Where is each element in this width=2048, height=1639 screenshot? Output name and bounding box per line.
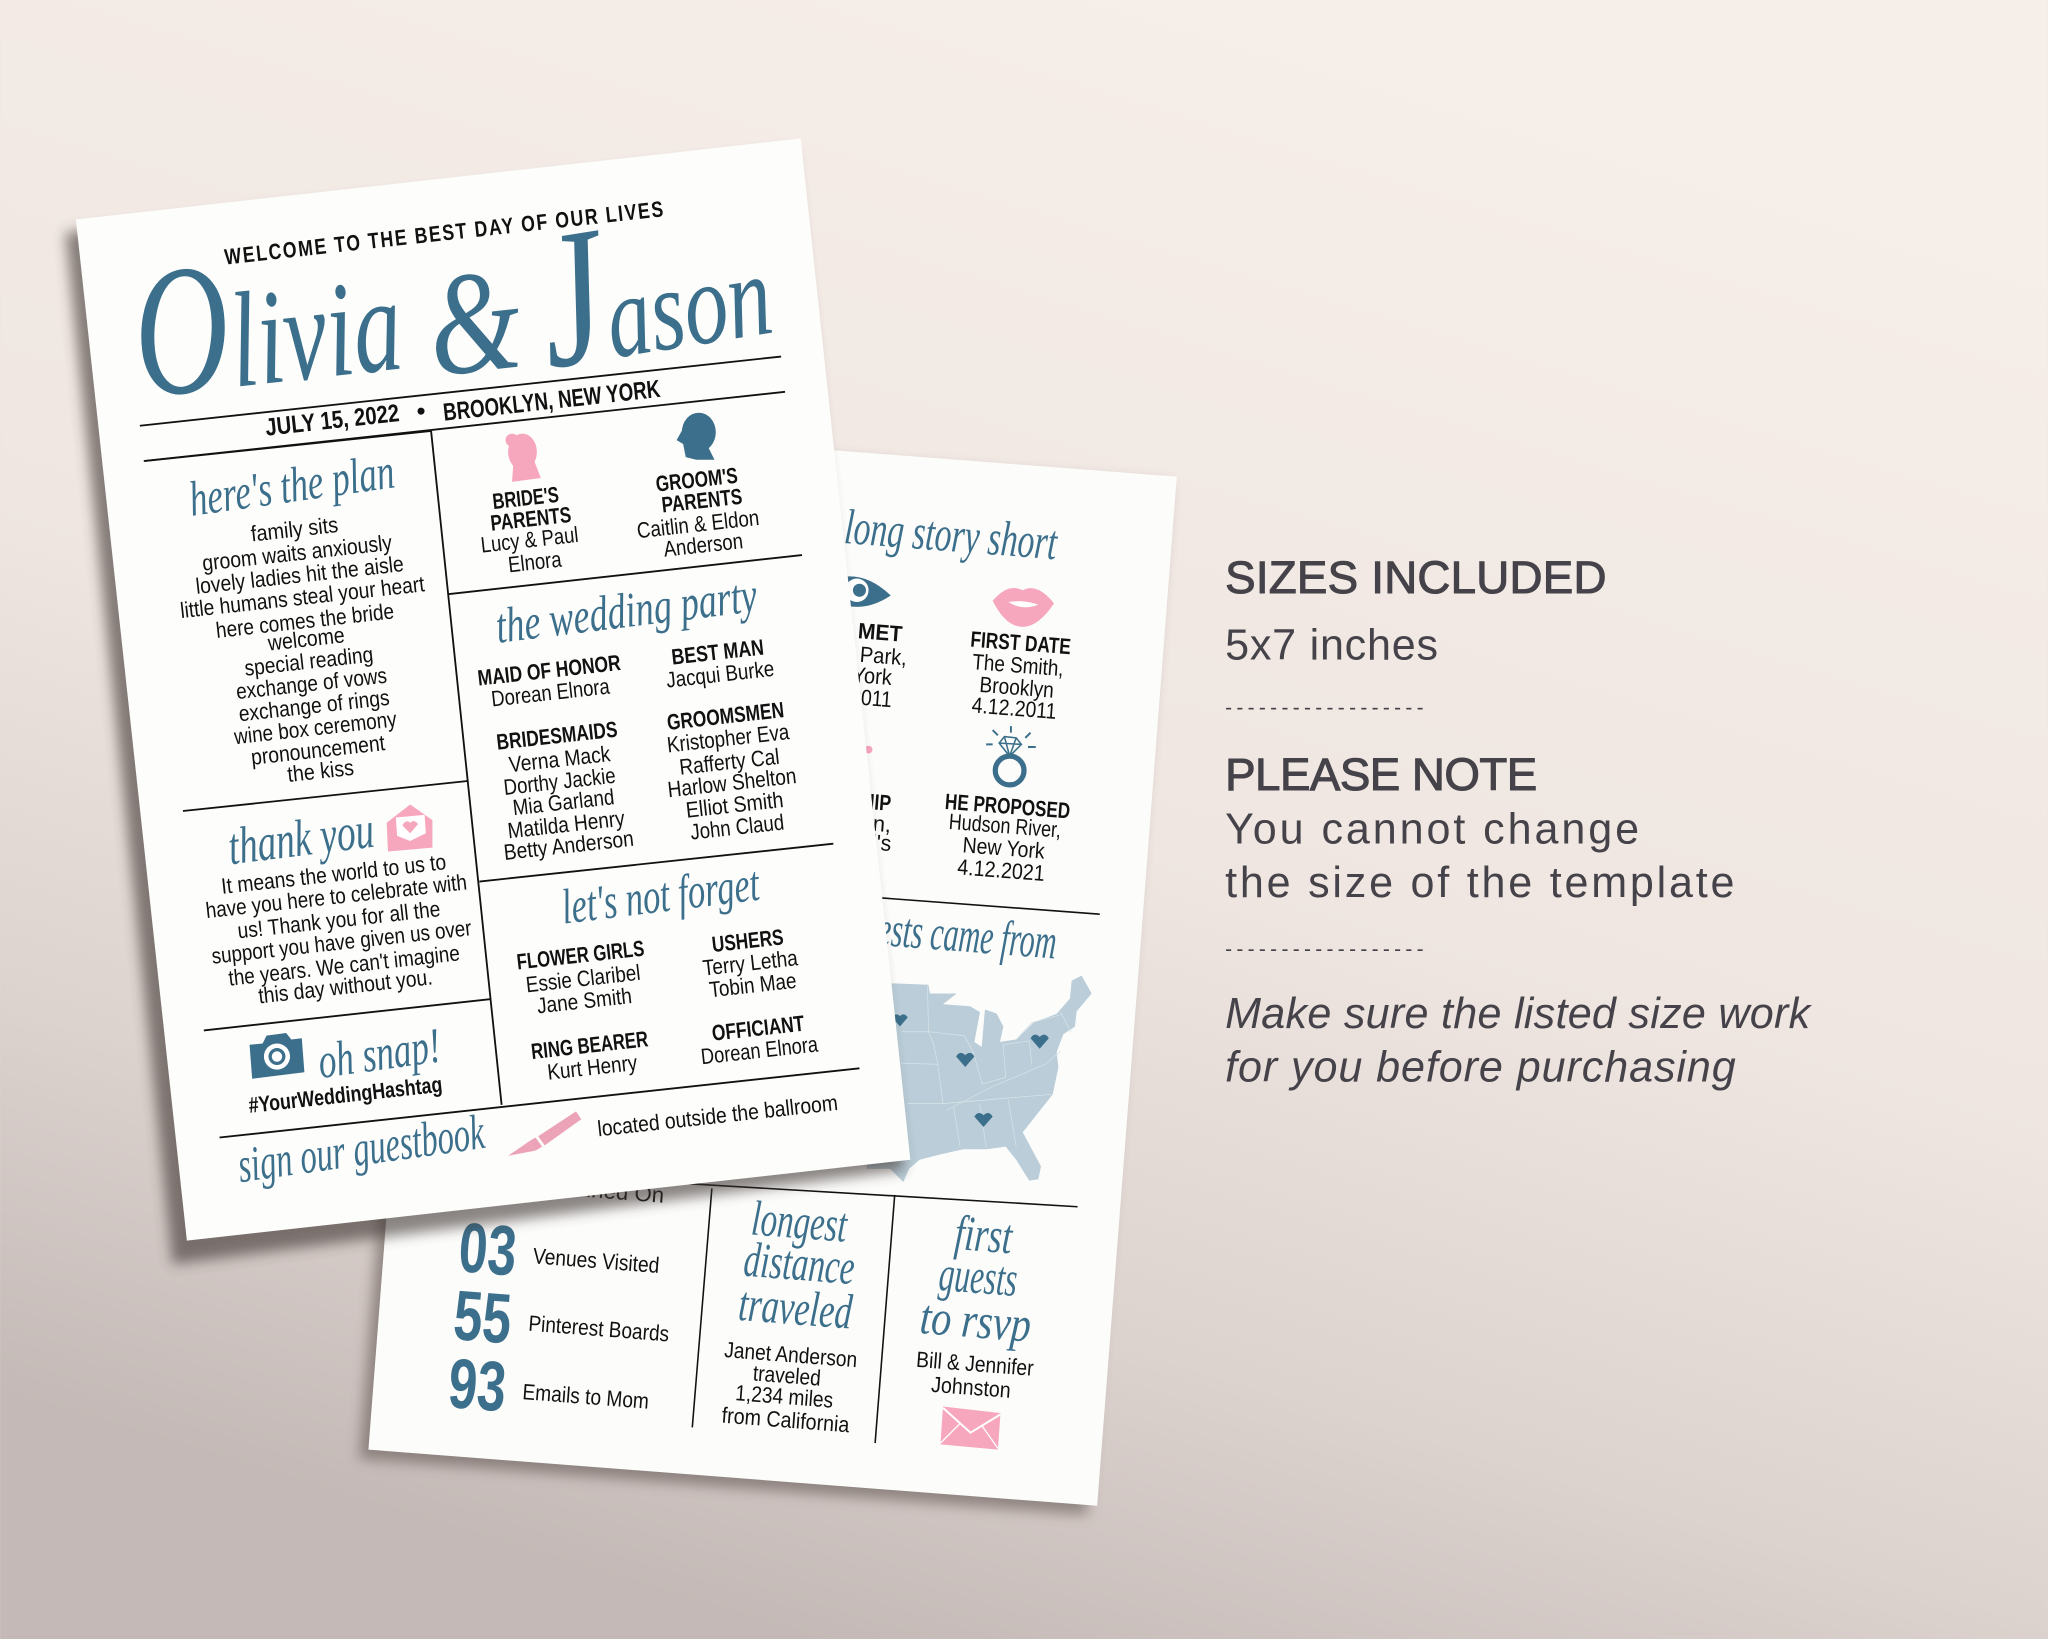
list: ceremony order: pronouncement [250,730,386,770]
icon: eye [816,576,891,607]
text: purchase warning: for you before purchasing [1225,1043,1736,1091]
panel: stats [446,1169,670,1426]
panel: thank you [204,801,473,1008]
icon: fountain pen [508,1111,581,1156]
block: ring bearer [530,1026,649,1085]
text: longest distance details: 1,234 miles [734,1380,834,1413]
block: ushers [701,924,800,1002]
block: first met: New York [806,659,894,690]
block: groom's parents: Anderson [662,528,744,562]
block: first met: 4.12.2011 [806,681,893,712]
list: ceremony order: little humans steal your heart [179,571,426,623]
stat: venues visited [456,1207,660,1290]
heading: first guests to rsvp: guests [937,1246,1019,1307]
list: ceremony order: family sits [250,512,339,547]
block: flower girls [515,936,645,1018]
block: maid of honor: Dorean Elnora [490,674,611,711]
panel: here's the plan [179,444,426,787]
guestbook location: located outside the ballroom [596,1090,839,1141]
heading: sizes included: SIZES INCLUDED [1225,552,1606,603]
title: names [123,160,782,438]
text: please note: You cannot change [1225,806,1639,854]
icon: love letter [387,804,432,851]
block: groomsmen: Kristopher Eva [666,719,791,757]
date and location: • [415,398,427,426]
list: ceremony order: exchange of rings [237,685,391,726]
block: he proposed: HE PROPOSED [944,789,1071,823]
block: ushers: Terry Letha [701,945,800,981]
text: thank you message: this day without you. [257,964,434,1008]
heading: first guests to rsvp: first [953,1205,1015,1264]
date and location: JULY 15, 2022 [264,400,401,442]
heading: longest distance traveled [737,1191,857,1340]
text: thank you message: the years. We can't imagine [227,940,461,991]
block: flower girls: FLOWER GIRLS [515,936,645,974]
block: first met: Central Park, [789,636,908,670]
block: officiant: OFFICIANT [711,1011,806,1046]
text: first guests names: Johnston [930,1372,1012,1403]
block: groom's parents: Caitlin & Eldon [636,505,760,543]
list: ceremony order: exchange of vows [235,663,388,704]
block: bridesmaids: Matilda Henry [506,805,627,843]
block: he proposed: New York [962,832,1046,864]
panel: longest distance traveled [721,1191,858,1437]
list: ceremony order: here comes the bride [215,598,395,643]
heading: first guests to rsvp: to rsvp [918,1289,1033,1353]
block: bridesmaids: Dorthy Jackie [502,763,617,800]
block: first date: FIRST DATE [970,627,1072,659]
block: bridesmaids: BRIDESMAIDS [495,717,619,755]
list: ceremony order: lovely ladies hit the aisle [194,551,405,599]
panel dividers: back bottom row [679,1183,1078,1443]
heading: longest distance traveled: longest [750,1191,850,1253]
text: thank you message: support you have given us over [210,915,473,969]
title: names: Jason [522,160,782,410]
block: ring bearer: RING BEARER [530,1026,649,1064]
text: please note: the size of the template [1225,859,1734,907]
stat: emails to mom: Emails to Mom [522,1379,650,1414]
block: relationship: Manhattan, [781,804,892,837]
text: first guests names: Bill & Jennifer [915,1347,1035,1381]
stat: pinterest boards: Pinterest Boards [528,1311,670,1346]
list: ceremony order: special reading [243,642,374,681]
heading: here's the plan: here's the plan [186,444,398,527]
block: bride's parents: PARENTS [489,502,572,536]
map hearts [892,1014,1049,1127]
block: groomsmen: Elliot Smith [685,787,785,823]
block: best man [665,635,775,693]
icon: envelope [940,1407,1000,1450]
block: first met: FIRST MET [791,613,904,647]
block: bridesmaids: Verna Mack [508,741,612,777]
panel: oh snap [247,1017,444,1118]
text: thank you message: us! Thank you for all the [236,896,441,943]
block: officiant: Dorean Elnora [700,1031,820,1069]
block: ushers: Tobin Mae [708,968,798,1002]
block: relationship [760,781,892,856]
block: he proposed: 4.12.2021 [956,854,1046,886]
block: bride's parents: BRIDE'S [491,482,560,514]
block: maid of honor [476,650,622,711]
block: flower girls: Jane Smith [536,983,633,1018]
block: relationship: Paul's [833,827,892,856]
stat: planned on: Hours Planned On [481,1169,665,1208]
block: groomsmen: John Claud [689,809,785,845]
heading: first guests to rsvp [918,1205,1033,1353]
block: groomsmen: Harlow Shelton [666,763,798,802]
text: thank you message: have you here to celebrate with [204,869,468,923]
icon: groom silhouette [677,413,716,460]
block: groom's parents: GROOM'S [654,463,739,497]
date and location [264,376,662,442]
block: best man: Jacqui Burke [665,656,775,693]
icon: diamond ring [986,726,1036,785]
list: ceremony order [179,512,426,787]
heading: longest distance traveled: traveled [737,1276,854,1340]
block: he proposed [944,789,1071,886]
block: groom's parents [636,463,760,562]
back card shadow [359,428,1169,1515]
text: longest distance details: Janet Anderson [723,1337,858,1372]
list: ceremony order: the kiss [286,755,355,787]
heading: the wedding party: the wedding party [493,567,761,654]
panel: parents [479,413,760,577]
back card sheet [368,421,1177,1506]
text: purchase warning [1225,990,1813,1091]
heading: sign our guestbook: sign our guestbook [234,1104,488,1193]
panel: back card [359,421,1177,1515]
stat: venues visited: Venues Visited [532,1243,660,1278]
block: groom's parents: PARENTS [660,484,744,517]
text: purchase warning: Make sure the listed size work [1225,990,1813,1038]
block: first date [970,627,1072,724]
stat: emails to mom [446,1343,650,1426]
stat: venues visited: 03 [456,1207,519,1290]
text: first guests names [915,1347,1035,1403]
block: groomsmen: Rafferty Cal [678,744,781,780]
block: first date: 4.12.2011 [971,692,1057,724]
front card shadow [65,151,904,1264]
heading: guests came from: guests came from [846,899,1059,970]
block: groomsmen: GROOMSMEN [666,697,785,735]
list: ceremony order: welcome [266,622,346,656]
text: longest distance details: from California [721,1403,851,1437]
block: bride's parents: Lucy & Paul [479,522,580,558]
panel: where guests came from [846,899,1092,1182]
panel: let's not forget [515,856,820,1085]
icon: lips [993,588,1054,627]
date and location: BROOKLYN, NEW YORK [442,376,662,427]
block: bride's parents: Elnora [507,547,563,577]
panel: product notes [1225,552,1813,1091]
heading: oh snap: oh snap! [315,1017,444,1089]
heading: let's not forget: let's not forget [558,856,763,935]
block: first met [789,613,908,712]
block: flower girls: Essie Claribel [525,960,642,997]
text: longest distance details [721,1337,858,1437]
panel: sign our guestbook [234,1090,839,1193]
block: first date: The Smith, [972,649,1065,681]
block: ring bearer: Kurt Henry [546,1050,639,1085]
title: names: Olivia [123,205,410,438]
block: maid of honor: MAID OF HONOR [476,650,622,691]
panel: front card [65,138,910,1264]
block: bridesmaids [495,717,635,865]
text: please note [1225,806,1734,907]
text: size: 5x7 inches [1225,622,1438,670]
heading: long story short: long story short [843,499,1060,570]
divider: ------------------ [1225,938,1424,961]
divider: ------------------ [1225,696,1424,719]
welcome heading: WELCOME TO THE BEST DAY OF OUR LIVES [223,196,666,270]
panel: first guests to rsvp [915,1205,1035,1450]
heading: please note: PLEASE NOTE [1225,749,1537,800]
block: bridesmaids: Betty Anderson [502,826,635,865]
heading: thank you: thank you [225,801,377,876]
hashtag: #YourWeddingHashtag [247,1072,443,1118]
title: names: & [420,237,529,408]
block: first date: Brooklyn [979,672,1055,703]
block: groomsmen [666,697,798,845]
map: eastern United States [867,976,1092,1182]
block: relationship: RELATIONSHIP [760,781,892,816]
stat: pinterest boards: 55 [451,1275,514,1358]
icon: hidden heart [865,746,873,754]
stat: pinterest boards [451,1275,670,1358]
list: ceremony order: groom waits anxiously [201,530,394,576]
front card sheet [76,138,910,1241]
block: officiant [700,1011,820,1069]
block: he proposed: Hudson River, [948,809,1062,843]
stat: emails to mom: 93 [446,1343,509,1426]
block: bride's parents [479,482,580,577]
list: ceremony order: wine box ceremony [232,706,399,749]
icon: camera [250,1033,304,1079]
block: best man: BEST MAN [670,635,765,670]
block: ushers: USHERS [711,924,785,957]
heading: longest distance traveled: distance [742,1232,857,1295]
text: thank you message: It means the world to us to [220,849,447,899]
icon: bride silhouette [506,434,541,482]
text: thank you message [204,849,473,1008]
text: longest distance details: traveled [752,1360,822,1391]
block: bridesmaids: Mia Garland [511,784,615,820]
panel: the wedding party [476,567,798,865]
panel: long story short [760,499,1072,886]
